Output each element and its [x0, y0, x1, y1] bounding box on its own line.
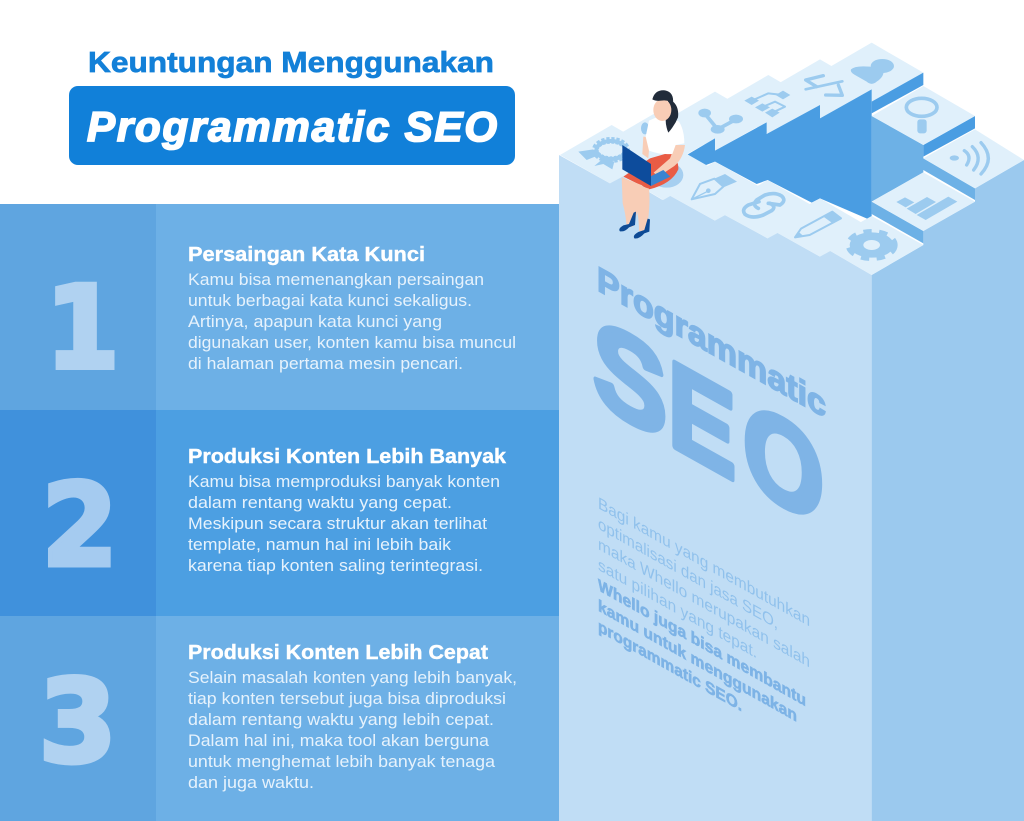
title: Keuntungan Menggunakan: Keuntungan Menggunakan: [88, 47, 494, 79]
tower text block: kamu untuk menggunakan: [598, 596, 797, 726]
neck: [656, 113, 666, 123]
icon: award: [578, 140, 627, 169]
panel: benefit 3: [0, 616, 559, 821]
tower heading: SEO: O: [743, 371, 824, 553]
heading: Persaingan Kata Kunci: Persaingan Kata Kunci: [188, 244, 425, 266]
inner wall: dark blue stepped: [687, 89, 872, 221]
text block: benefit 3 description: [188, 669, 517, 792]
icon: org chart: [744, 91, 790, 117]
tower heading: SEO: E: [668, 332, 736, 507]
icon: pencil: [795, 212, 841, 237]
right tiles: [872, 86, 1024, 231]
tower text block: Bagi kamu yang membutuhkan: [598, 493, 810, 630]
text block: benefit 2 description: dalam rentang waktu yang cepat.: [188, 494, 452, 512]
number 1: 1: [46, 262, 120, 394]
text block: benefit 3 description: Selain masalah konten yang lebih banyak,: [188, 669, 517, 687]
text block: benefit 2 description: [188, 473, 500, 575]
woman with laptop: [619, 90, 685, 238]
seat shadow: [650, 162, 683, 188]
hair: [652, 90, 673, 104]
text block: benefit 1 description: untuk berbagai kata kunci sekaligus.: [188, 292, 472, 310]
arms: [642, 137, 650, 158]
panel: benefit 1: [0, 204, 559, 410]
icon: partial tile symbol: [641, 122, 649, 134]
text block: benefit 1 description: Kamu bisa memenangkan persaingan: [188, 271, 484, 289]
tower text block: maka Whello merupakan salah: [598, 534, 810, 671]
skirt: [623, 152, 678, 189]
text block: benefit 1 description: [188, 271, 516, 373]
lower stair tiles: [560, 125, 923, 275]
inner wall: medium blue: [872, 116, 975, 202]
tower text block: Whello juga bisa membantu: [598, 575, 806, 710]
magnifier tile side: [923, 116, 975, 157]
text block: benefit 3 description: dalam rentang waktu yang lebih cepat.: [188, 711, 494, 729]
text block: benefit 3 description: Dalam hal ini, maka tool akan berguna: [188, 732, 490, 750]
tower right face: [872, 160, 1024, 821]
tower text block: optimalisasi dan jasa SEO,: [598, 514, 778, 633]
text block: benefit 3 description: untuk menghemat lebih banyak tenaga: [188, 753, 496, 771]
face: [653, 99, 671, 121]
icon: pen nib: [692, 174, 737, 199]
tower heading: SEO: [593, 289, 824, 553]
number 2: 2: [42, 459, 118, 592]
user tile side: [872, 73, 923, 113]
text block: benefit 3 description: tiap konten tersebut juga bisa diproduksi: [188, 690, 506, 708]
text block: benefit 1 description: digunakan user, konten kamu bisa muncul: [188, 334, 516, 352]
laptop screen: [622, 145, 651, 186]
icon: chain link: [744, 194, 784, 217]
text block: benefit 3 description: dan juga waktu.: [188, 774, 314, 792]
tower text block: satu pilihan yang tepat.: [598, 555, 757, 662]
icon: user: [851, 59, 894, 84]
title banner: Programmatic SEO: [69, 86, 515, 165]
icon: magnifier: [906, 98, 937, 133]
ponytail: [666, 98, 678, 133]
laptop base: [650, 170, 670, 186]
number 3: 3: [39, 656, 117, 788]
text block: benefit 2 description: Meskipun secara struktur akan terlihat: [188, 515, 487, 533]
tower text block: [598, 493, 810, 726]
tower left face: [559, 155, 872, 821]
title banner: Programmatic SEO: Programmatic SEO: [87, 103, 497, 150]
text block: benefit 2 description: template, namun hal ini lebih baik: [188, 536, 452, 554]
text block: benefit 1 description: Artinya, apapun kata kunci yang: [188, 313, 442, 331]
icon: code brackets: [806, 76, 842, 95]
isometric tower illustration: [559, 43, 1024, 821]
tower heading: SEO: S: [593, 289, 667, 467]
heading: Produksi Konten Lebih Banyak: Produksi Konten Lebih Banyak: [188, 446, 507, 468]
tower text block: programmatic SEO.: [598, 616, 742, 715]
icon: share nodes: [698, 109, 743, 134]
upper stair tiles: [612, 43, 923, 167]
chart tile side: [872, 202, 923, 243]
icon: bar chart: [896, 197, 957, 220]
shirt: [646, 117, 684, 154]
shoes: [619, 212, 636, 231]
panel: benefit 2: [0, 410, 559, 616]
icon: gear: [849, 232, 894, 258]
legs: [622, 177, 642, 227]
text block: benefit 2 description: Kamu bisa memproduksi banyak konten: [188, 473, 500, 491]
text block: benefit 1 description: di halaman pertama mesin pencari.: [188, 355, 463, 373]
tower heading: Programmatic: Programmatic: [597, 258, 826, 426]
text block: benefit 2 description: karena tiap konten saling terintegrasi.: [188, 557, 483, 575]
icon: wifi signal: [950, 143, 988, 174]
heading: Produksi Konten Lebih Cepat: Produksi Konten Lebih Cepat: [188, 642, 488, 664]
